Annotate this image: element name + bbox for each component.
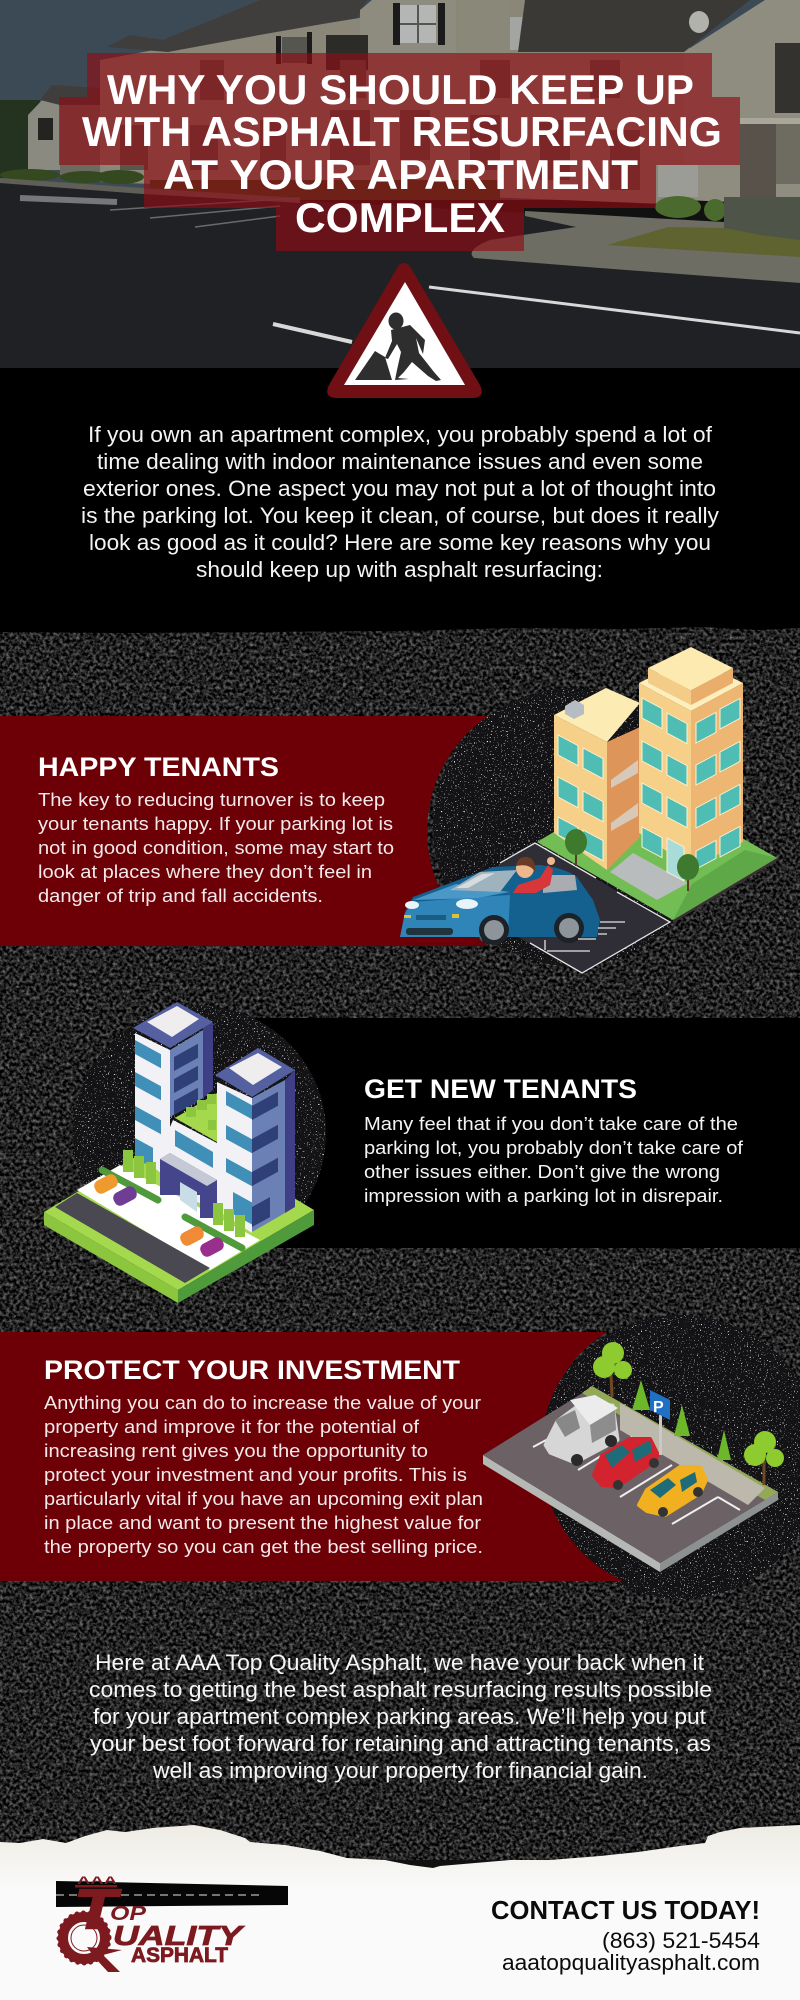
lawn: [537, 780, 777, 920]
body text: look at places where they don’t feel in: [38, 861, 372, 882]
right building: [658, 0, 800, 205]
body text: not in good condition, some may start to: [38, 837, 394, 858]
illustration: apartment building with car: [400, 647, 777, 973]
trees: [565, 829, 699, 891]
center block: [160, 1120, 217, 1210]
closing text: Here at AAA Top Quality Asphalt, we have your back when it: [95, 1650, 704, 1675]
speckled circle: [433, 688, 711, 966]
lower floor windows: [120, 60, 640, 190]
body text: The key to reducing turnover is to keep: [38, 789, 385, 810]
sidewalk: [620, 1403, 765, 1505]
OP: OP: [110, 1903, 147, 1925]
right tower windows: [226, 1091, 278, 1227]
hero photo: [0, 0, 800, 368]
T letter: T: [74, 1877, 122, 1940]
AAA: AAA: [77, 1875, 117, 1887]
heading: GET NEW TENANTS: [364, 1074, 637, 1104]
title text: AT YOUR APARTMENT: [163, 151, 638, 198]
body text: in place and want to present the highest value for: [44, 1512, 481, 1533]
closing text: for your apartment complex parking areas. We’ll help you put: [93, 1704, 706, 1729]
shrubs: [0, 169, 726, 221]
contact block: CONTACT US TODAY!: [491, 1895, 760, 1925]
heading: PROTECT YOUR INVESTMENT: [44, 1355, 461, 1385]
body text: the property so you can get the best selling price.: [44, 1536, 483, 1557]
logo: [56, 1875, 288, 1972]
hedges: [102, 1150, 245, 1248]
garden terrace: [175, 1093, 217, 1142]
parking sign: [650, 1390, 670, 1455]
UALITY: UALITY: [113, 1920, 245, 1951]
title banner: [59, 53, 740, 251]
heading: HAPPY TENANTS: [38, 752, 279, 782]
yellow car: [639, 1467, 706, 1517]
car body: [400, 865, 600, 937]
slab: [483, 1455, 660, 1572]
contact block: aaatopqualityasphalt.com: [502, 1950, 760, 1975]
parking lot: [447, 843, 670, 973]
black intro band: [0, 368, 800, 633]
red banner: [0, 716, 488, 946]
asphalt background: [0, 620, 800, 1860]
car windows: [543, 875, 577, 893]
parking stripes: [20, 198, 800, 342]
road band: [56, 1881, 288, 1907]
central gable: [360, 0, 456, 60]
utility box: [724, 197, 800, 240]
closing text: comes to getting the best asphalt resurfacing results possible: [89, 1677, 712, 1702]
roof unit: [565, 700, 584, 719]
entrance: [160, 1153, 217, 1218]
body text: Anything you can do to increase the value of your: [44, 1392, 481, 1413]
body text: your tenants happy. If your parking lot is: [38, 813, 393, 834]
parking sign: P: [653, 1399, 664, 1416]
footer torn paper: [0, 1825, 800, 2000]
illustration: isometric towers: [44, 1002, 314, 1303]
parking lines: [533, 1437, 740, 1524]
title text: [82, 66, 722, 241]
title text: WHY YOU SHOULD KEEP UP: [107, 66, 694, 113]
right tower: [639, 683, 691, 867]
contact block: [491, 1895, 760, 1975]
left curb: [0, 178, 300, 203]
rosette: [59, 1913, 122, 1972]
body text: impression with a parking lot in disrepair.: [364, 1185, 723, 1206]
apartment main facade: [100, 0, 690, 205]
intro text: should keep up with asphalt resurfacing:: [196, 557, 603, 582]
windshield: [450, 870, 517, 892]
road: [0, 180, 800, 368]
satellite dish: [689, 11, 709, 33]
body text: particularly vital if you have an upcoming exit plan: [44, 1488, 483, 1509]
panel: happy tenants: [0, 647, 777, 973]
title text: COMPLEX: [295, 194, 505, 241]
upper windows: [276, 0, 528, 70]
speckled circle: [73, 1006, 327, 1260]
body text: parking lot, you probably don’t take care of: [364, 1137, 744, 1158]
grass: [607, 227, 800, 257]
panel: get new tenants: [44, 1002, 800, 1303]
left tower windows: [135, 1040, 198, 1168]
body text: protect your investment and your profits. This is: [44, 1464, 467, 1485]
van: [545, 1395, 618, 1466]
trees: [593, 1342, 784, 1485]
sidewalk: [472, 211, 800, 283]
red car: [594, 1439, 659, 1490]
red highlight boxes: [59, 53, 740, 251]
sky: [0, 0, 800, 200]
motion lines: [547, 922, 625, 951]
driver: [513, 857, 555, 893]
panel: protect your investment: [0, 1315, 800, 1599]
road: [55, 1193, 210, 1283]
red banner: [0, 1332, 623, 1581]
walkway: [610, 853, 688, 900]
terrace plants: [186, 1094, 216, 1130]
pavement: [77, 1165, 260, 1270]
intro text: time dealing with indoor maintenance issues and even some: [97, 449, 703, 474]
treeline: [0, 100, 40, 178]
closing text: your best foot forward for retaining and attracting tenants, as: [90, 1731, 711, 1756]
contact block: (863) 521-5454: [602, 1928, 760, 1953]
left roof: [107, 0, 367, 52]
intro text: exterior ones. One aspect you may not put a lot of thought into: [83, 476, 716, 501]
intro text: look as good as it could? Here are some key reasons why you: [89, 530, 711, 555]
left tower: [554, 715, 607, 870]
small left house: [28, 85, 110, 175]
right roof: [518, 0, 750, 52]
body text: [38, 789, 394, 906]
illustration: parking lot: [483, 1342, 784, 1572]
hood and bumper: [400, 895, 510, 937]
body text: [44, 1392, 483, 1557]
base: [44, 1130, 314, 1290]
body text: property and improve it for the potential of: [44, 1416, 420, 1437]
parked cars: [92, 1172, 226, 1259]
icon: road work sign: [327, 263, 482, 398]
right tower: [217, 1082, 252, 1233]
left tower: [135, 1033, 170, 1180]
intro text: If you own an apartment complex, you probably spend a lot of: [88, 422, 713, 447]
body text: Many feel that if you don’t take care of the: [364, 1113, 738, 1134]
body text: [364, 1113, 744, 1206]
closing text: [89, 1650, 712, 1783]
intro text: [81, 422, 719, 582]
body text: danger of trip and fall accidents.: [38, 885, 323, 906]
wheels: [479, 913, 584, 945]
speckled circle: [538, 1315, 800, 1599]
intro text: is the parking lot. You keep it clean, of course, but does it really: [81, 503, 719, 528]
closing text: well as improving your property for financial gain.: [152, 1758, 648, 1783]
title text: WITH ASPHALT RESURFACING: [82, 108, 722, 155]
windows: [558, 698, 740, 881]
black banner: [253, 1018, 800, 1248]
ASPHALT: ASPHALT: [131, 1944, 228, 1967]
green strip: [582, 1386, 778, 1500]
body text: other issues either. Don’t give the wrong: [364, 1161, 720, 1182]
car: [400, 857, 625, 951]
body text: increasing rent gives you the opportunity to: [44, 1440, 428, 1461]
stairwell: [607, 727, 640, 870]
